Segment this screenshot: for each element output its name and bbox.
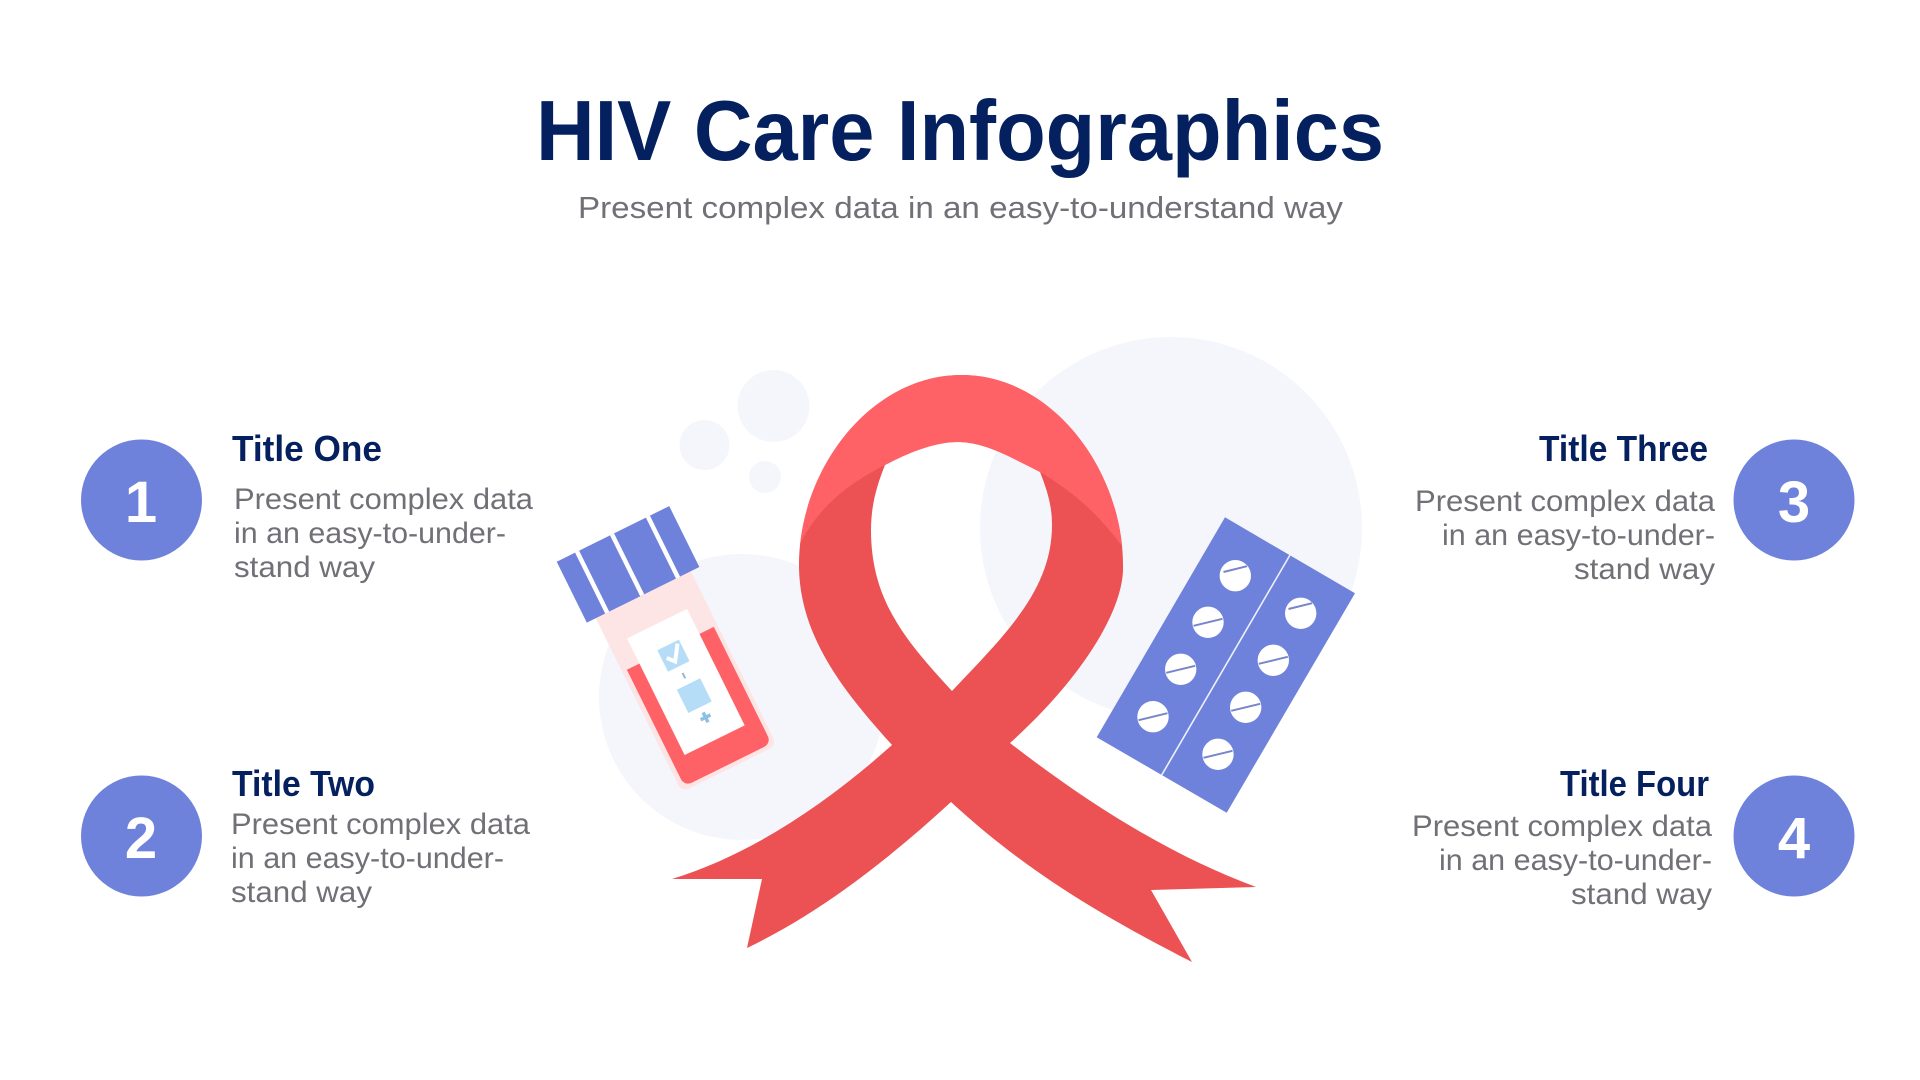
body text 2: Present complex data bbox=[231, 808, 530, 841]
plus mark bbox=[698, 710, 713, 725]
body text 4: in an easy-to-under- bbox=[1439, 844, 1712, 877]
body text 2: stand way bbox=[231, 876, 372, 909]
ribbon loop highlight bbox=[800, 375, 1122, 546]
body text 3: stand way bbox=[1574, 553, 1715, 586]
pills bbox=[1137, 560, 1316, 770]
perforation line bbox=[1162, 555, 1290, 775]
item 3 bbox=[1415, 428, 1854, 586]
badge 1 bbox=[81, 440, 202, 560]
heading: title three: Title Three bbox=[1539, 428, 1708, 469]
vial liquid bbox=[627, 627, 771, 786]
background circles bbox=[599, 337, 1362, 840]
minus mark bbox=[682, 673, 686, 679]
body text 3: in an easy-to-under- bbox=[1442, 519, 1715, 552]
body text 3 bbox=[1415, 485, 1715, 586]
body text 1: stand way bbox=[234, 551, 375, 584]
body text 3: Present complex data bbox=[1415, 485, 1715, 518]
body text 1 bbox=[234, 483, 533, 584]
badge 4: 4 bbox=[1778, 806, 1810, 871]
badge 4 bbox=[1734, 776, 1854, 896]
vial label bbox=[627, 609, 745, 755]
subtitle: Present complex data in an easy-to-understand way bbox=[578, 190, 1344, 225]
badge 2: 2 bbox=[125, 806, 157, 871]
body text 4 bbox=[1412, 810, 1712, 911]
body text 4: stand way bbox=[1571, 878, 1712, 911]
body text 4: Present complex data bbox=[1412, 810, 1712, 843]
blister sheet bbox=[1097, 517, 1355, 813]
badge 1: 1 bbox=[125, 470, 157, 535]
body text 1: in an easy-to-under- bbox=[234, 517, 506, 550]
item 4 bbox=[1412, 763, 1854, 911]
item 1 bbox=[81, 428, 533, 584]
body text 2 bbox=[231, 808, 530, 909]
empty checkbox bbox=[677, 678, 712, 713]
item 2 bbox=[81, 763, 530, 909]
heading: title four: Title Four bbox=[1560, 763, 1709, 804]
badge 2 bbox=[81, 776, 202, 896]
title: HIV Care Infographics bbox=[536, 84, 1384, 179]
body text 2: in an easy-to-under- bbox=[231, 842, 504, 875]
heading: title two: Title Two bbox=[232, 763, 375, 804]
pill score lines bbox=[1138, 566, 1312, 758]
vial body bbox=[592, 564, 777, 792]
icon: test vial bbox=[557, 506, 785, 797]
body text 1: Present complex data bbox=[234, 483, 533, 516]
icon: blister pack bbox=[1097, 517, 1355, 813]
icon: awareness ribbon bbox=[672, 360, 1256, 962]
checkbox bbox=[657, 640, 690, 672]
vial cap bbox=[557, 506, 699, 623]
badge 3: 3 bbox=[1778, 470, 1810, 535]
badge 3 bbox=[1734, 440, 1854, 560]
heading: title one: Title One bbox=[232, 428, 382, 469]
ribbon body bbox=[672, 375, 1256, 962]
